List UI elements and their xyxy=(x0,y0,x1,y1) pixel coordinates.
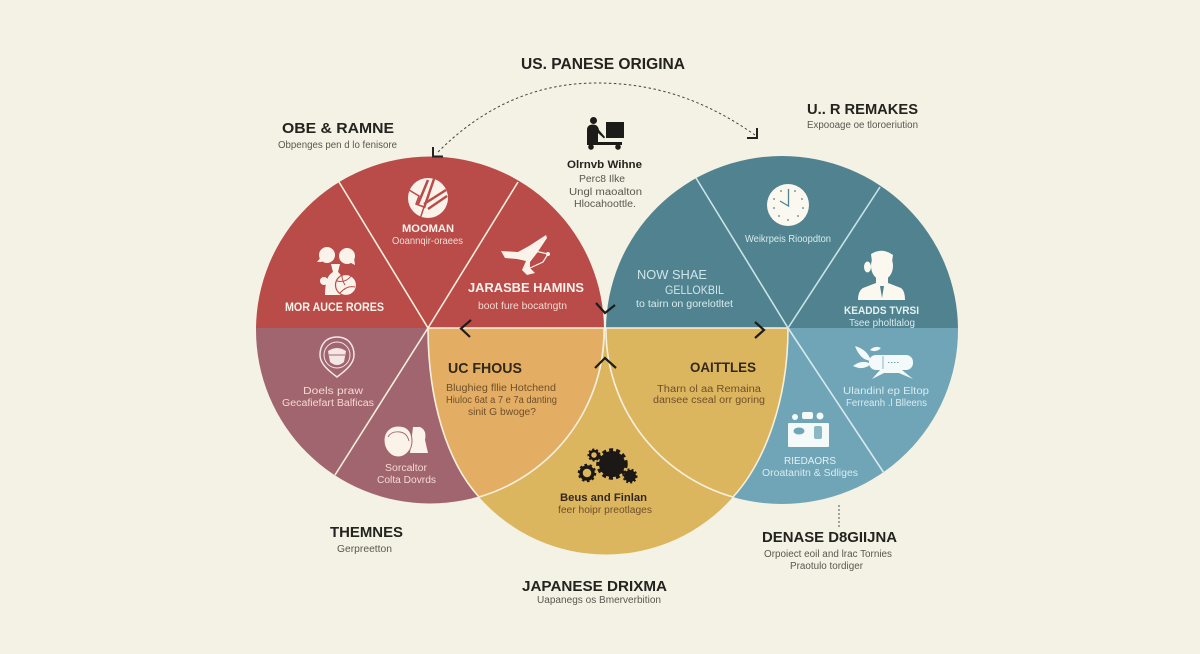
label: remakes xyxy=(807,101,918,131)
text: mooman xyxy=(392,223,463,247)
label: denase dogiina: Orpoiect eoil and lrac Tornies xyxy=(764,549,892,560)
label: denase dogiina: DENASE D8GIIJNA xyxy=(762,529,897,546)
text: center top note xyxy=(567,159,642,210)
arrow: chevron down xyxy=(596,303,615,313)
label: denase dogiina xyxy=(762,529,897,572)
arrow: right corner head xyxy=(747,128,757,138)
title: US. PANESE ORIGINA xyxy=(521,56,685,73)
icon: round emblem xyxy=(408,178,448,219)
label: remakes: U.. R REMAKES xyxy=(807,101,918,118)
text: oattles: Tharn ol aa Remaina xyxy=(657,384,761,395)
text: jarasbe hamins: JARASBE HAMINS xyxy=(468,280,584,295)
icon: figures and ball xyxy=(317,247,356,296)
icon: person bust xyxy=(858,251,905,300)
text: keadds tvrsi: KEADDS TVRSI xyxy=(844,305,919,317)
text: oattles: OAITTLES xyxy=(690,359,756,375)
icon: stove xyxy=(788,412,829,447)
panel: left circle xyxy=(256,156,604,504)
arrow: chevron up xyxy=(595,358,616,368)
panel: yellow overlap xyxy=(606,328,788,497)
text: uc fhous: sinit G bwoge? xyxy=(468,407,536,418)
label: themnes: THEMNES xyxy=(330,524,403,541)
label: japanese drixma: JAPANESE DRIXMA xyxy=(522,578,667,595)
text: mooman: MOOMAN xyxy=(402,223,454,235)
text: leaf caption: Ulandinl ep Eltop xyxy=(843,386,929,397)
label: remakes: Expooage oe tloroeriution xyxy=(807,120,918,131)
text: leaf caption xyxy=(843,386,929,409)
text: now shae: to tairn on gorelotltet xyxy=(636,299,733,310)
text: center top note: Perc8 Ilke xyxy=(579,174,625,185)
text: leaf caption: Ferreanh .l Blleens xyxy=(846,398,927,409)
panel: right circle xyxy=(606,156,958,504)
text: uc fhous: Blughieg fllie Hotchend xyxy=(446,383,556,394)
text: now shae xyxy=(636,267,733,310)
text: keadds tvrsi xyxy=(844,305,919,329)
label: japanese drixma: Uapanegs os Bmerverbition xyxy=(537,595,661,606)
text: mooman: Ooannqir-oraees xyxy=(392,236,463,247)
text: faces caption: Sorcaltor xyxy=(385,463,428,474)
text: gears caption xyxy=(558,492,652,516)
text: center top note: Olrnvb Wihne xyxy=(567,159,642,171)
segment: teal upper half xyxy=(606,156,958,328)
text: uc fhous: Hiuloc 6at a 7 e 7a danting xyxy=(446,395,557,406)
text: mor auce rores: MOR AUCE RORES xyxy=(285,302,384,314)
icon: bird shape xyxy=(501,235,550,275)
label: obe and ramne: OBE & RAMNE xyxy=(282,120,394,137)
icon: gears xyxy=(579,450,636,482)
label: themnes xyxy=(330,524,403,555)
label: obe and ramne: Obpenges pen d lo fenisore xyxy=(278,140,397,151)
text: center top note: Ungl maoalton xyxy=(569,187,642,198)
segment: red upper half xyxy=(256,156,604,328)
text: uc fhous: UC FHOUS xyxy=(448,360,522,377)
label: japanese drixma xyxy=(522,578,667,606)
segment: light teal lower half xyxy=(734,328,958,504)
text: riedaors xyxy=(762,455,858,479)
arrow: chevron right xyxy=(755,322,764,338)
text: gears caption: Beus and Finlan xyxy=(560,492,647,504)
text: jarasbe hamins xyxy=(468,280,584,312)
panel: bottom yellow lens xyxy=(479,330,733,555)
text: uc fhous xyxy=(446,360,557,418)
icon: person with cart xyxy=(587,117,624,150)
text: keadds tvrsi: Tsee pholtlalog xyxy=(849,318,915,329)
icon: two faces xyxy=(384,426,428,457)
panel: orange overlap xyxy=(428,328,604,497)
text: faces caption: Colta Dovrds xyxy=(377,475,436,486)
text: clock caption: Weikrpeis Rioopdton xyxy=(745,234,831,245)
arrow: left corner head xyxy=(433,147,443,156)
text: faces caption xyxy=(377,463,436,486)
text: now shae: GELLOKBIL xyxy=(665,285,725,297)
text: now shae: NOW SHAE xyxy=(637,267,707,282)
icon: badge xyxy=(320,337,354,377)
text: badge caption xyxy=(282,386,374,409)
text: badge caption: Doels praw xyxy=(303,386,364,397)
label: denase dogiina: Praotulo tordiger xyxy=(790,561,864,572)
text: gears caption: feer hoipr preotlages xyxy=(558,505,652,516)
text: oattles xyxy=(653,359,765,406)
arrow: dashed arc xyxy=(438,83,755,152)
arrow: chevron left xyxy=(461,320,471,337)
segment: mauve lower half xyxy=(256,328,478,504)
icon: leaf bubble xyxy=(853,346,913,379)
dotted connector xyxy=(838,505,840,528)
label: themnes: Gerpreetton xyxy=(337,544,392,555)
text: riedaors: Oroatanitn & Sdliges xyxy=(762,468,858,479)
text: badge caption: Gecafiefart Balficas xyxy=(282,398,374,409)
label: obe and ramne xyxy=(278,120,397,151)
icon: clock xyxy=(767,184,809,226)
text: riedaors: RIEDAORS xyxy=(784,455,836,467)
text: oattles: dansee cseal orr goring xyxy=(653,395,765,406)
text: jarasbe hamins: boot fure bocatngtn xyxy=(478,301,567,312)
text: center top note: Hlocahoottle. xyxy=(574,199,636,210)
